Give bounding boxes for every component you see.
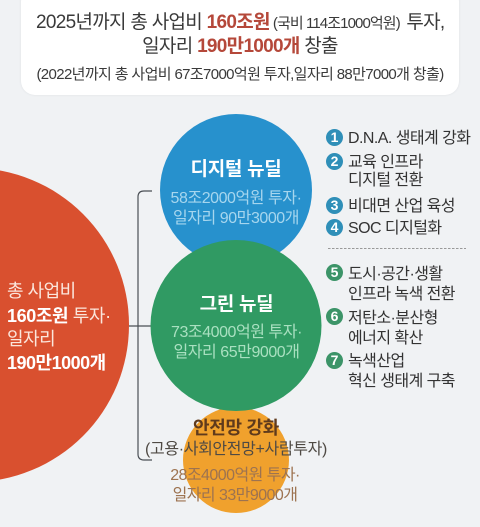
item 3: 3 [331, 197, 338, 213]
item 2: 2 [331, 153, 338, 169]
bracket connector [129, 191, 152, 460]
green circle text: 일자리 65만9000개 [173, 344, 300, 361]
total circle text: 총 사업비 [7, 281, 76, 301]
item 5: 5 [331, 264, 338, 280]
green circle [150, 240, 322, 411]
green circle text: 73조4000억원 투자· [171, 324, 302, 341]
item 5 [326, 264, 343, 281]
total circle [0, 168, 129, 482]
top summary box [21, 0, 459, 95]
green circle text [171, 324, 302, 361]
orange circle text: 일자리 33만9000개 [173, 487, 297, 504]
orange circle subtitle: (고용·사회안전망+사람투자) [145, 441, 327, 458]
list: digital new deal items [326, 129, 470, 237]
list: green new deal items: 에너지 확산 [348, 330, 423, 347]
item 2 [326, 153, 343, 170]
list: digital new deal items: SOC 디지털화 [348, 220, 442, 237]
sub headline: (2022년까지 총 사업비 67조7000억원 투자,일자리 88만7000개 창출) [36, 66, 444, 83]
headline line 1: 2025년까지 총 사업비 160조원(국비 114조1000억원) 투자, [36, 12, 445, 33]
item 1 [326, 129, 343, 146]
item 7 [326, 352, 343, 369]
list divider [328, 248, 466, 250]
blue circle text: 일자리 90만3000개 [173, 210, 299, 227]
list: green new deal items [326, 264, 455, 390]
list: green new deal items: 인프라 녹색 전환 [348, 286, 455, 303]
blue circle title: 디지털 뉴딜 [191, 159, 281, 180]
item 7: 7 [331, 352, 338, 368]
list: digital new deal items: 디지털 전환 [348, 172, 423, 189]
item 4: 4 [331, 219, 338, 235]
list: green new deal items: 도시·공간·생활 [348, 266, 443, 283]
list: digital new deal items: 비대면 산업 육성 [348, 198, 455, 215]
blue circle text [171, 190, 301, 227]
blue circle [160, 114, 312, 266]
list: green new deal items: 녹색산업 [348, 353, 405, 370]
orange circle title: 안전망 강화 [193, 418, 279, 438]
list: green new deal items: 저탄소·분산형 [348, 310, 438, 327]
item 6: 6 [331, 308, 338, 324]
orange circle [183, 407, 289, 513]
item 6 [326, 308, 343, 325]
item 3 [326, 197, 343, 214]
total circle text: 160조원 투자· [7, 306, 111, 326]
total circle text: 190만1000개 [7, 353, 106, 373]
list: digital new deal items: D.N.A. 생태계 강화 [348, 130, 470, 147]
total circle text [7, 281, 111, 373]
orange circle text [170, 466, 300, 504]
item 4 [326, 219, 343, 236]
list: green new deal items: 혁신 생태계 구축 [348, 373, 455, 390]
green circle title: 그린 뉴딜 [200, 294, 273, 315]
total circle text: 일자리 [7, 329, 55, 349]
item 1: 1 [331, 129, 338, 145]
list: digital new deal items: 교육 인프라 [348, 154, 423, 171]
headline line 2: 일자리 190만1000개 창출 [142, 36, 338, 57]
orange circle text: 28조4000억원 투자· [170, 467, 300, 484]
blue circle text: 58조2000억원 투자· [171, 190, 301, 207]
